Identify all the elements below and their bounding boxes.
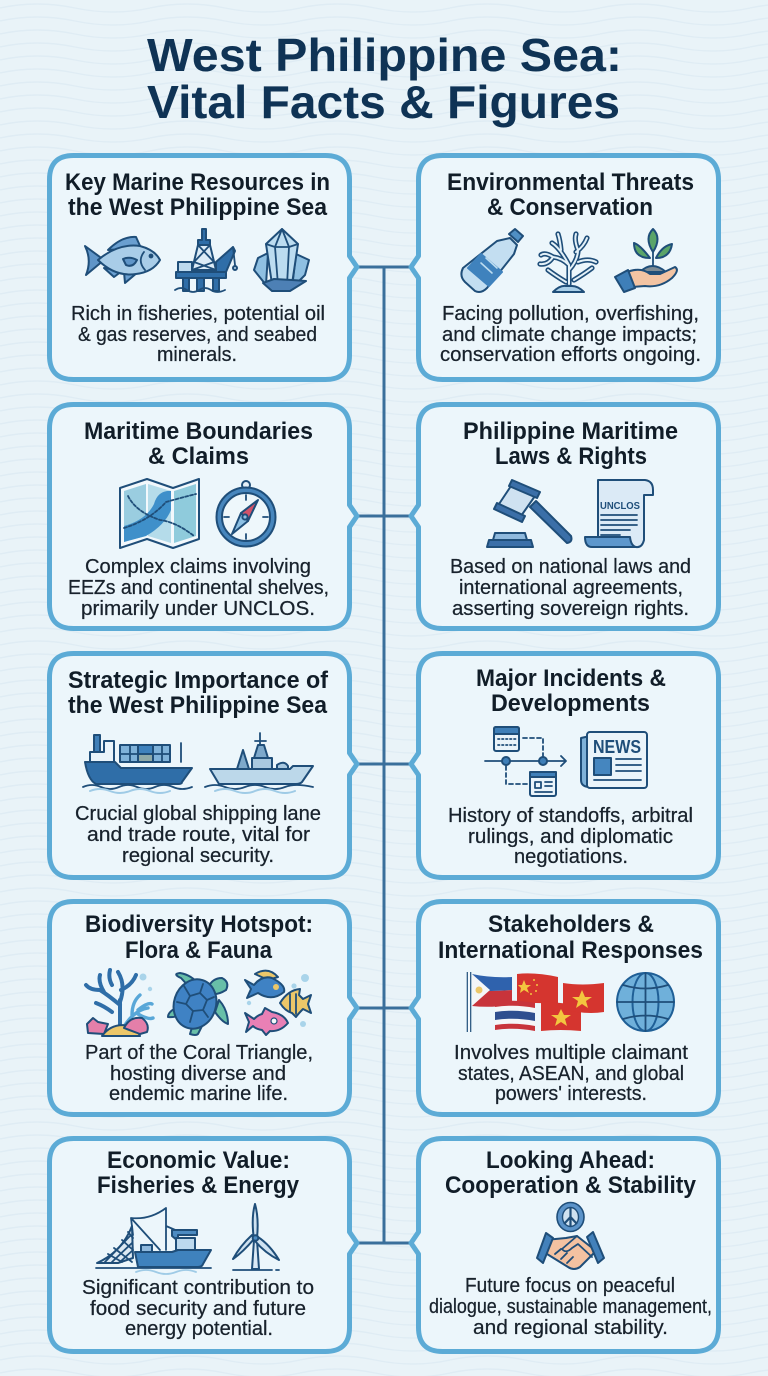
flag: Philippines	[469, 972, 512, 1032]
panel: stakeholders	[411, 902, 718, 1114]
panel: strategic importance	[50, 654, 357, 878]
heading: key marine resources	[65, 169, 330, 221]
body: philippine maritime laws	[450, 556, 691, 620]
body: strategic importance: regional security.	[122, 845, 274, 867]
panel: looking ahead	[411, 1138, 718, 1352]
body: stakeholders: Involves multiple claimant	[454, 1042, 688, 1064]
body: major incidents: negotiations.	[514, 846, 628, 868]
body: key marine resources: Rich in fisheries, potential oil	[71, 303, 325, 325]
icon: wind turbine	[233, 1204, 279, 1270]
panel: major incidents	[411, 654, 718, 878]
body: major incidents: rulings, and diplomatic	[468, 826, 673, 848]
heading: environmental threats	[447, 169, 694, 221]
body: economic value: Significant contribution to	[82, 1277, 314, 1299]
heading: philippine maritime laws: Philippine Maritime	[463, 418, 678, 445]
body: major incidents: History of standoffs, arbitral	[448, 805, 693, 827]
heading: major incidents: Developments	[491, 690, 650, 717]
heading: maritime boundaries	[84, 418, 313, 470]
icon: compass	[216, 481, 276, 546]
body: environmental threats: and climate change impacts;	[442, 324, 697, 346]
icon: newspaper: NEWS	[593, 737, 641, 757]
icon: fish	[85, 237, 160, 283]
body: philippine maritime laws: asserting sovereign rights.	[452, 598, 689, 620]
flag: Vietnam back	[563, 983, 604, 1013]
icon: colorful coral reef	[86, 970, 153, 1036]
icon: hand holding plant	[615, 229, 677, 292]
heading: major incidents	[476, 665, 666, 717]
panel: environmental threats	[411, 156, 718, 380]
icon: crystals	[254, 229, 309, 291]
heading: strategic importance: Strategic Importance of	[68, 667, 329, 694]
heading: key marine resources: the West Philippine Sea	[68, 194, 328, 221]
heading: economic value: Economic Value:	[107, 1147, 290, 1174]
body: strategic importance: Crucial global shipping lane	[75, 803, 321, 825]
body: key marine resources: minerals.	[157, 344, 237, 366]
icon: plastic bottle	[461, 229, 523, 292]
body: looking ahead: Future focus on peaceful	[465, 1275, 675, 1297]
flag: Thailand	[495, 1001, 535, 1031]
title: Vital Facts & Figures	[147, 76, 620, 128]
central connector timeline	[356, 266, 412, 1243]
heading: maritime boundaries: Maritime Boundaries	[84, 418, 313, 445]
heading: stakeholders: Stakeholders &	[488, 911, 654, 938]
body: looking ahead: and regional stability.	[473, 1317, 668, 1339]
icon: cargo ship	[83, 735, 192, 793]
body: strategic importance	[75, 803, 321, 867]
body: economic value: food security and future	[90, 1298, 306, 1320]
heading: looking ahead: Looking Ahead:	[486, 1147, 655, 1174]
icon: sea turtle	[167, 973, 228, 1035]
body: environmental threats: conservation efforts ongoing.	[440, 344, 701, 366]
heading: economic value: Fisheries & Energy	[97, 1172, 300, 1199]
heading: environmental threats: & Conservation	[487, 194, 653, 221]
heading: biodiversity hotspot: Biodiversity Hotspot:	[85, 911, 313, 938]
heading: strategic importance: the West Philippine Sea	[68, 692, 328, 719]
body: philippine maritime laws: international agreements,	[459, 577, 683, 599]
body: biodiversity hotspot: Part of the Coral Triangle,	[85, 1042, 313, 1064]
heading: looking ahead	[445, 1147, 697, 1199]
panel: philippine maritime laws	[411, 404, 718, 628]
panel: biodiversity hotspot	[50, 902, 357, 1114]
panel: key marine resources	[50, 156, 357, 380]
heading: major incidents: Major Incidents &	[476, 665, 666, 692]
icon: tropical fish	[245, 971, 311, 1035]
body: maritime boundaries	[68, 556, 329, 620]
body: maritime boundaries: primarily under UNCLOS.	[81, 598, 315, 620]
icon: gavel	[487, 480, 572, 547]
body: economic value	[82, 1277, 314, 1340]
icon: globe	[617, 973, 674, 1031]
heading: key marine resources: Key Marine Resources in	[65, 169, 330, 196]
heading: maritime boundaries: & Claims	[148, 443, 249, 470]
icon: naval ship	[205, 733, 313, 793]
body: environmental threats: Facing pollution, overfishing,	[442, 303, 699, 325]
icon: handshake	[537, 1232, 604, 1269]
body: maritime boundaries: Complex claims involving	[85, 556, 311, 578]
heading: stakeholders	[438, 911, 703, 964]
icon: timeline with calendar	[485, 727, 566, 796]
panel: maritime boundaries	[50, 404, 357, 628]
heading: philippine maritime laws: Laws & Rights	[495, 443, 647, 470]
body: stakeholders	[454, 1042, 688, 1105]
heading: strategic importance	[68, 667, 329, 719]
icon: UNCLOS scroll	[585, 480, 653, 547]
icon: offshore oil rig	[175, 229, 237, 292]
icon: newspaper	[581, 732, 647, 788]
body: philippine maritime laws: Based on national laws and	[450, 556, 691, 578]
heading: environmental threats: Environmental Threats	[447, 169, 694, 196]
body: maritime boundaries: EEZs and continental shelves,	[68, 577, 329, 599]
body: major incidents	[448, 805, 693, 868]
body: key marine resources	[71, 303, 325, 366]
icon: fishing boat with net	[96, 1208, 211, 1274]
flag: Vietnam front	[541, 1001, 581, 1031]
body: stakeholders: powers' interests.	[495, 1083, 647, 1105]
heading: economic value	[97, 1147, 300, 1199]
flag: China	[517, 973, 558, 1004]
heading: philippine maritime laws	[463, 418, 678, 470]
icon: UNCLOS scroll: UNCLOS	[600, 501, 640, 512]
title	[147, 29, 622, 128]
body: looking ahead: dialogue, sustainable management,	[429, 1296, 712, 1318]
body: economic value: energy potential.	[125, 1318, 273, 1340]
title: West Philippine Sea:	[147, 29, 622, 81]
icon: national flags	[469, 972, 604, 1032]
body: stakeholders: states, ASEAN, and global	[458, 1063, 684, 1085]
heading: stakeholders: International Responses	[438, 937, 703, 964]
body: strategic importance: and trade route, vital for	[87, 824, 310, 846]
heading: biodiversity hotspot: Flora & Fauna	[125, 937, 273, 964]
body: biodiversity hotspot: hosting diverse and	[110, 1063, 286, 1085]
icon: coral	[540, 234, 596, 292]
body: biodiversity hotspot	[85, 1042, 313, 1105]
panel: economic value	[50, 1138, 357, 1352]
icon: folded map	[120, 479, 199, 548]
icon: peace symbol	[557, 1202, 584, 1232]
heading: looking ahead: Cooperation & Stability	[445, 1172, 697, 1199]
body: looking ahead	[429, 1275, 712, 1339]
body: key marine resources: & gas reserves, and seabed	[78, 324, 317, 346]
body: environmental threats	[440, 303, 701, 366]
heading: biodiversity hotspot	[85, 911, 313, 964]
body: biodiversity hotspot: endemic marine life.	[109, 1083, 288, 1105]
